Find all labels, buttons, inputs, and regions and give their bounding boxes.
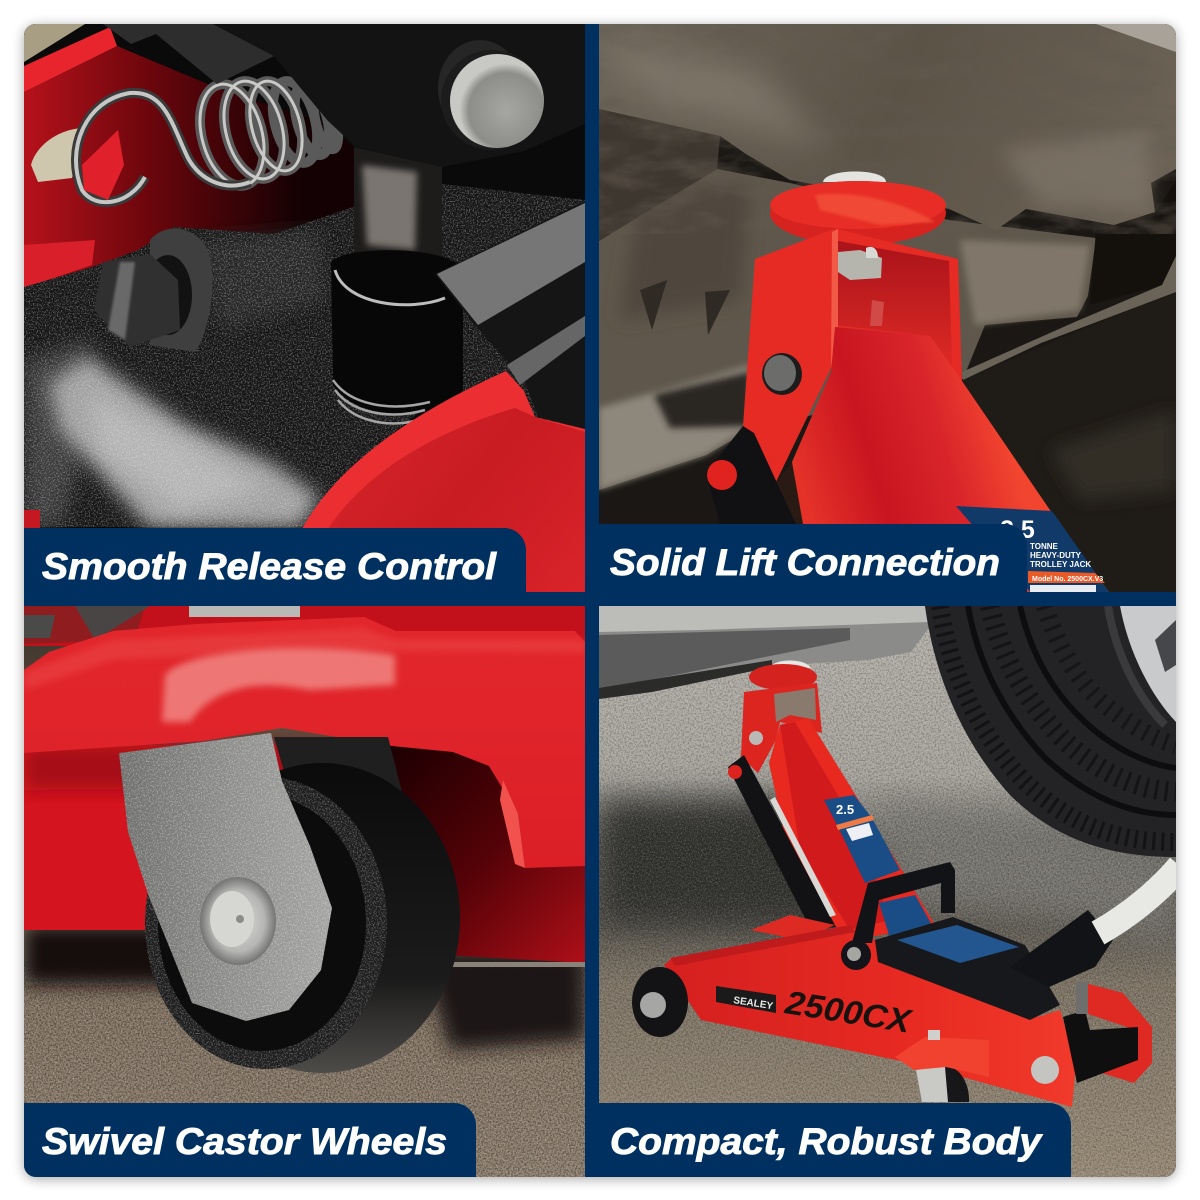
black lever plate — [435, 201, 585, 429]
carry handle — [841, 862, 955, 970]
axle cap — [200, 877, 276, 965]
front bolt — [1031, 1056, 1059, 1084]
caption: solid lift connection — [585, 524, 1176, 606]
caption: compact robust body — [585, 1103, 1071, 1177]
blue warning label: Model No. 2500CX.V3 — [1032, 576, 1103, 583]
blue warning label — [956, 506, 1109, 592]
threaded collar — [331, 250, 463, 423]
casting arm — [24, 184, 585, 527]
blue label — [824, 795, 932, 938]
panel: smooth release control photo — [24, 24, 585, 592]
SEALEY badge: SEALEY — [733, 995, 774, 1012]
right hole — [1092, 238, 1096, 274]
cut-out hole — [31, 128, 78, 182]
top blurred strip — [24, 606, 585, 646]
panel: solid lift connection photo — [599, 24, 1176, 592]
red base sliver — [24, 510, 40, 530]
castor wheel — [119, 733, 460, 1073]
rear castor — [916, 1065, 969, 1102]
top underbody — [599, 24, 1176, 230]
pivot bolt — [762, 353, 802, 395]
floor shadow — [24, 930, 162, 999]
caption: smooth release control — [24, 528, 585, 606]
hydraulic cylinder — [1063, 982, 1138, 1083]
piston rod — [354, 147, 442, 256]
base plate — [664, 925, 1076, 1107]
top plate — [875, 917, 1060, 1020]
blue warning label: TROLLEY JACK — [1030, 560, 1091, 569]
pump socket — [1010, 910, 1113, 987]
rear saddle red flap — [751, 915, 835, 940]
second underbody panel — [599, 169, 1096, 490]
blue warning label: HEAVY-DUTY — [1030, 551, 1082, 560]
tyre — [925, 606, 1176, 857]
model name: 2500CX — [782, 983, 915, 1040]
red shelf — [24, 617, 585, 868]
lower red body — [24, 745, 280, 930]
front guard — [895, 1030, 989, 1077]
bolt and washer — [94, 229, 212, 352]
pivot pin — [438, 40, 544, 150]
SEALEY badge — [716, 986, 776, 1013]
release link — [728, 755, 836, 930]
left flap — [599, 109, 720, 241]
steel fork — [119, 733, 332, 1021]
caption: compact robust body: Compact, Robust Body — [610, 1121, 1044, 1162]
jack body — [792, 327, 1109, 592]
car sill — [599, 606, 945, 699]
fork bracket — [743, 229, 962, 482]
panel: compact robust body photo — [599, 606, 1180, 1177]
lower dark background — [963, 290, 1176, 592]
front wheel — [632, 967, 688, 1037]
caption: solid lift connection: Solid Lift Connection — [610, 542, 1000, 583]
jack arm — [769, 718, 935, 937]
caption: smooth release control: Smooth Release Control — [42, 546, 497, 587]
blue label: 2.5 — [836, 802, 854, 817]
saddle — [749, 660, 817, 690]
caption: swivel castor wheels — [24, 1103, 476, 1177]
right ear — [1085, 983, 1152, 1083]
fork bracket — [741, 683, 822, 773]
clip plate — [103, 24, 274, 84]
panel: swivel castor wheels photo — [24, 606, 585, 1177]
saddle — [770, 172, 946, 245]
blue warning label: 2.5 — [1000, 516, 1035, 544]
white hose handle — [1098, 866, 1180, 933]
spring — [76, 74, 343, 202]
black block — [213, 24, 585, 167]
red curved guard — [295, 371, 585, 592]
release link — [706, 426, 803, 524]
blue warning label: TONNE — [1030, 542, 1059, 551]
red mounting plate — [24, 46, 356, 290]
caption: swivel castor wheels: Swivel Castor Wheels — [42, 1121, 447, 1162]
